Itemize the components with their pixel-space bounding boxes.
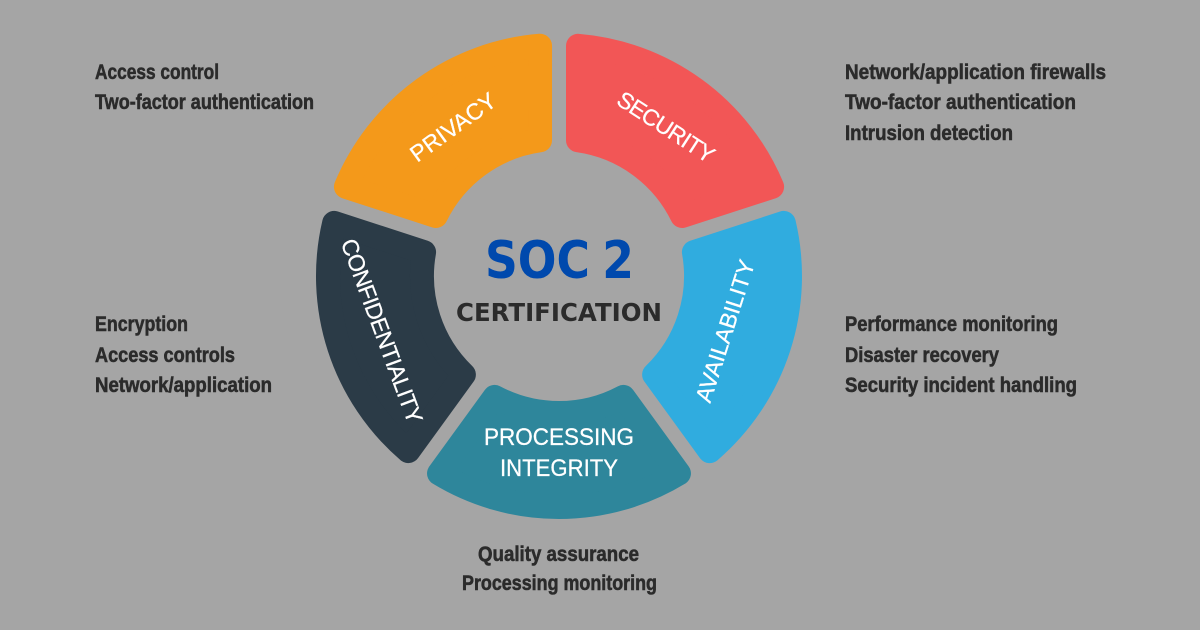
text block: confidentiality controls: Network/application (95, 374, 272, 397)
text block: processing integrity controls (462, 543, 657, 595)
text block: privacy controls: Access control (95, 61, 219, 84)
text block: security controls: Intrusion detection (845, 122, 1013, 145)
center title (456, 231, 662, 327)
segment: confidentiality: CONFIDENTIALITY (336, 235, 428, 427)
text block: confidentiality controls: Access controls (95, 344, 235, 367)
segment: security (578, 46, 772, 216)
segment: confidentiality (251, 199, 508, 451)
text block: security controls (845, 61, 1106, 145)
text block: security controls: Two-factor authentication (845, 91, 1076, 114)
segment: privacy: PRIVACY (405, 87, 501, 167)
text block: processing integrity controls: Quality assurance (478, 543, 639, 566)
text block: privacy controls (95, 61, 314, 114)
text block: availability controls: Performance monitoring (845, 313, 1058, 336)
text block: processing integrity controls: Processing monitoring (462, 572, 657, 595)
segment: processing integrity: INTEGRITY (500, 455, 618, 482)
segment: availability: AVAILABILITY (690, 257, 760, 405)
segment: privacy (346, 2, 568, 239)
text block: availability controls: Security incident handling (845, 374, 1077, 397)
segment: processing integrity: PROCESSING (484, 424, 634, 451)
text block: confidentiality controls: Encryption (95, 313, 188, 336)
center title: SOC 2 (485, 231, 634, 291)
center title: CERTIFICATION (456, 298, 662, 327)
segment: processing integrity (422, 336, 679, 587)
segment: availability (622, 223, 844, 460)
segment: security: SECURITY (612, 86, 720, 168)
text block: availability controls: Disaster recovery (845, 344, 999, 367)
text block: security controls: Network/application firewalls (845, 61, 1106, 84)
text block: confidentiality controls (95, 313, 272, 397)
text block: availability controls (845, 313, 1077, 397)
text block: privacy controls: Two-factor authentication (95, 91, 314, 114)
